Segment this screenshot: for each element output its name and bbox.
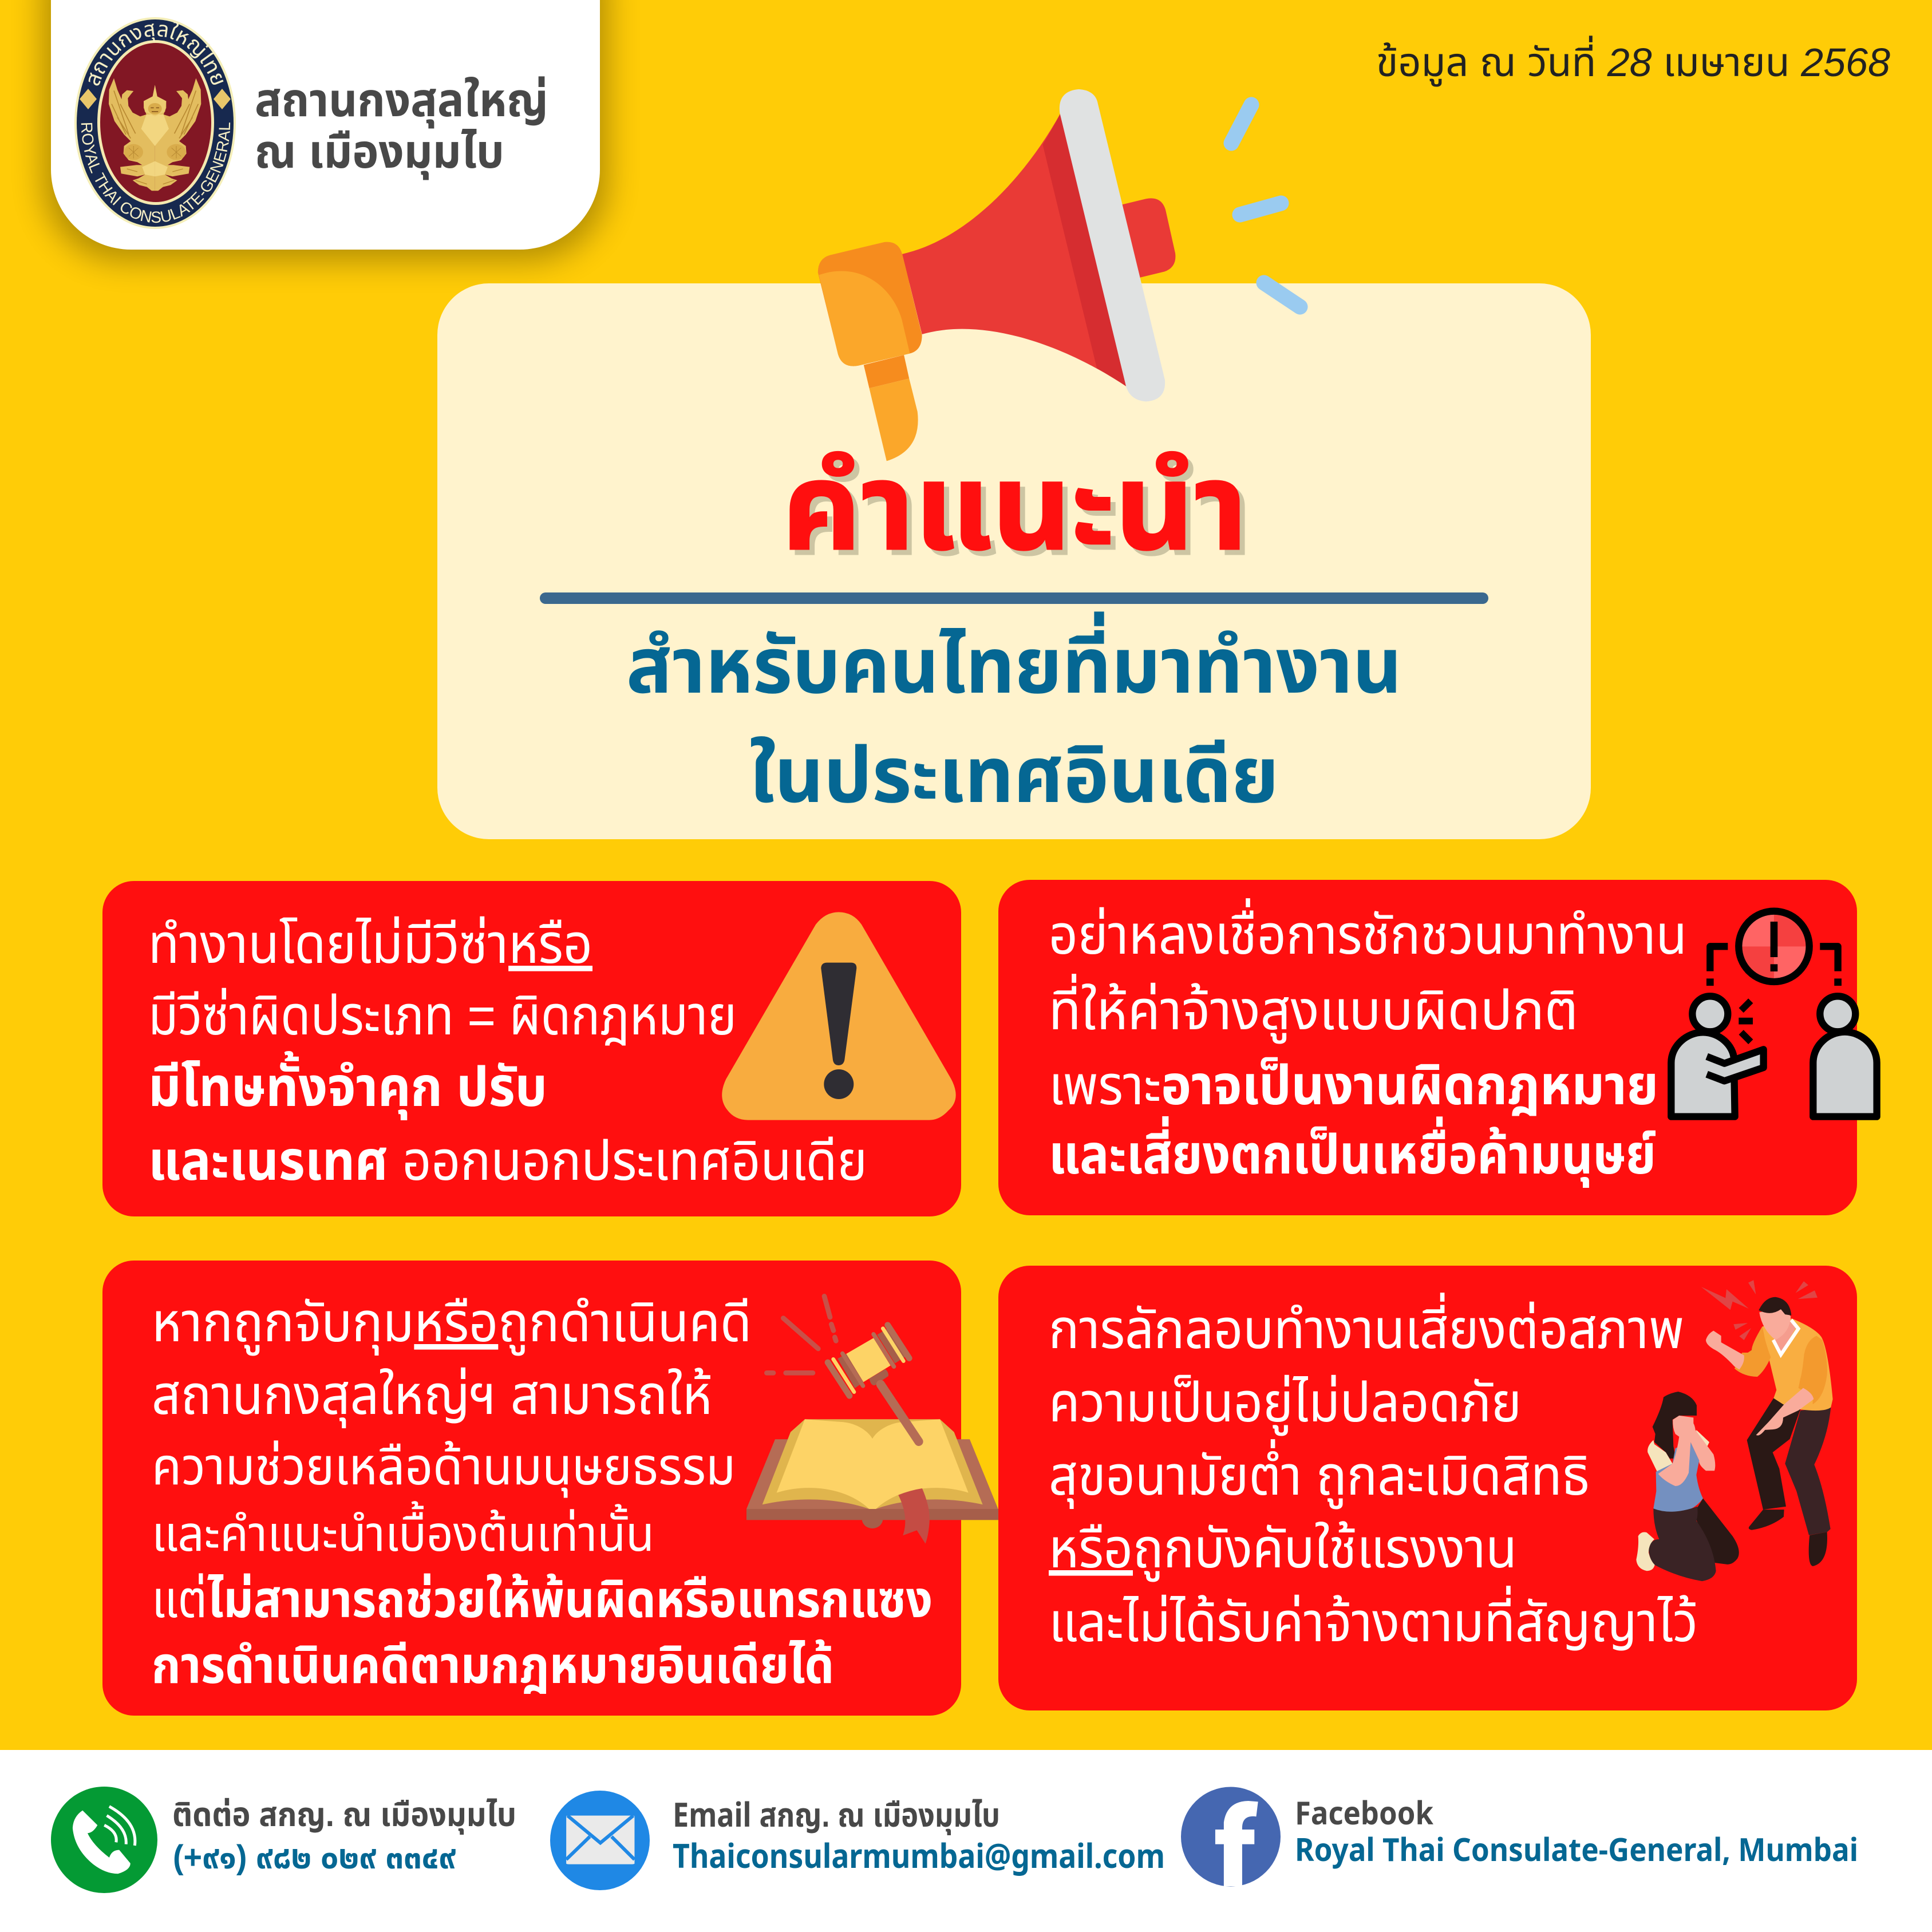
card 3 text: และคำแนะนำเบื้องต้นเท่านั้น <box>152 1501 654 1562</box>
icon: phone <box>51 1787 157 1893</box>
panel: consulate header card <box>24 0 626 279</box>
card 2 text: และเสี่ยงตกเป็นเหยื่อค้ามนุษย์ <box>1049 1116 1656 1188</box>
contact: facebook text: Royal Thai Consulate-General, Mumbai <box>1295 1827 1858 1871</box>
card 4 text: และไม่ได้รับค่าจ้างตามที่สัญญาไว้ <box>1049 1586 1698 1653</box>
panel: card 1 illegal work warning <box>102 881 961 1216</box>
card 3 text: การดำเนินคดีตามกฎหมายอินเดียได้ <box>152 1637 834 1694</box>
icon: gavel and law book <box>746 1296 998 1544</box>
card 4 text: การลักลอบทำงานเสี่ยงต่อสภาพ <box>1049 1293 1684 1360</box>
card 2 text: เพราะอาจเป็นงานผิดกฎหมาย <box>1049 1055 1658 1116</box>
subtitle: ในประเทศอินเดีย <box>749 732 1279 819</box>
contact: facebook text: Facebook <box>1295 1791 1433 1834</box>
panel: card 4 living conditions risks <box>998 1266 1857 1710</box>
contact: facebook text <box>1295 1791 1858 1871</box>
icon: megaphone <box>818 89 1300 461</box>
subtitle <box>626 611 1402 819</box>
card 4 text <box>1049 1293 1698 1653</box>
card 1 text: มีวีซ่าผิดประเภท = ผิดกฎหมาย <box>148 985 737 1046</box>
card 2 text: ที่ให้ค่าจ้างสูงแบบผิดปกติ <box>1049 974 1578 1044</box>
contact: phone text: (+๙๑) ๙๘๒ ๐๒๙ ๓๓๔๙ <box>173 1839 456 1876</box>
icon: facebook <box>1181 1787 1281 1887</box>
card 1 text: ทำงานโดยไม่มีวีซ่าหรือ <box>148 914 592 975</box>
woman <box>1636 1392 1739 1581</box>
panel: card 3 legal assistance limits <box>102 1261 998 1716</box>
card 1 text: มีโทษทั้งจำคุก ปรับ <box>148 1050 547 1120</box>
logo text: consulate name: ณ เมืองมุมไบ <box>255 126 504 180</box>
icon: email <box>550 1791 650 1890</box>
subtitle: สำหรับคนไทยที่มาทำงาน <box>626 611 1402 709</box>
man <box>1701 1280 1833 1566</box>
card 3 text: หากถูกจับกุมหรือถูกดำเนินคดี <box>152 1292 752 1356</box>
panel: footer contacts <box>0 1750 1932 1932</box>
panel: title box <box>437 283 1591 839</box>
contact: phone text: ติดต่อ สกญ. ณ เมืองมุมไบ <box>172 1796 516 1835</box>
card 1 text: และเนรเทศ ออกนอกประเทศอินเดีย <box>148 1131 867 1192</box>
contact: email text: Email สกญ. ณ เมืองมุมไบ <box>673 1791 1000 1836</box>
card 1 text <box>148 914 867 1192</box>
heading shadow: คำแนะนำ <box>787 444 1253 580</box>
card 4 text: หรือถูกบังคับใช้แรงงาน <box>1049 1518 1517 1582</box>
contact: email text: Thaiconsularmumbai@gmail.com <box>673 1832 1165 1878</box>
card 3 text <box>152 1292 933 1694</box>
date stamp: ข้อมูล ณ วันที่ 28 เมษายน 2568 <box>1376 35 1890 87</box>
icon: warning triangle <box>722 912 956 1120</box>
card 2 text: อย่าหลงเชื่อการชักชวนมาทำงาน <box>1049 898 1687 966</box>
contact: email text <box>673 1791 1165 1878</box>
title divider <box>540 592 1488 604</box>
card 3 text: แต่ไม่สามารถช่วยให้พ้นผิดหรือแทรกแซง <box>152 1571 933 1629</box>
card 3 text: สถานกงสุลใหญ่ฯ สามารถให้ <box>152 1365 712 1428</box>
card 2 text <box>1049 898 1687 1188</box>
card 3 text: ความช่วยเหลือด้านมนุษยธรรม <box>152 1439 736 1498</box>
contact: phone text <box>172 1796 516 1876</box>
card 4 text: สุขอนามัยต่ำ ถูกละเมิดสิทธิ <box>1049 1439 1590 1510</box>
icon: two people with alert <box>1671 911 1877 1117</box>
icon: consulate seal: สถานกงสุลใหญ่ไทย <box>88 22 223 86</box>
illustration: angry man and kneeling woman <box>1636 1280 1833 1581</box>
heading: main title: คำแนะนำ <box>782 439 1247 575</box>
icon: consulate seal: ROYAL THAI CONSULATE-GENERAL <box>81 123 230 223</box>
icon: consulate seal <box>74 17 236 229</box>
card 4 text: ความเป็นอยู่ไม่ปลอดภัย <box>1049 1372 1522 1436</box>
panel: card 2 trafficking warning <box>998 880 1877 1215</box>
logo text: consulate name <box>255 74 548 180</box>
logo text: consulate name: สถานกงสุลใหญ่ <box>255 74 548 128</box>
